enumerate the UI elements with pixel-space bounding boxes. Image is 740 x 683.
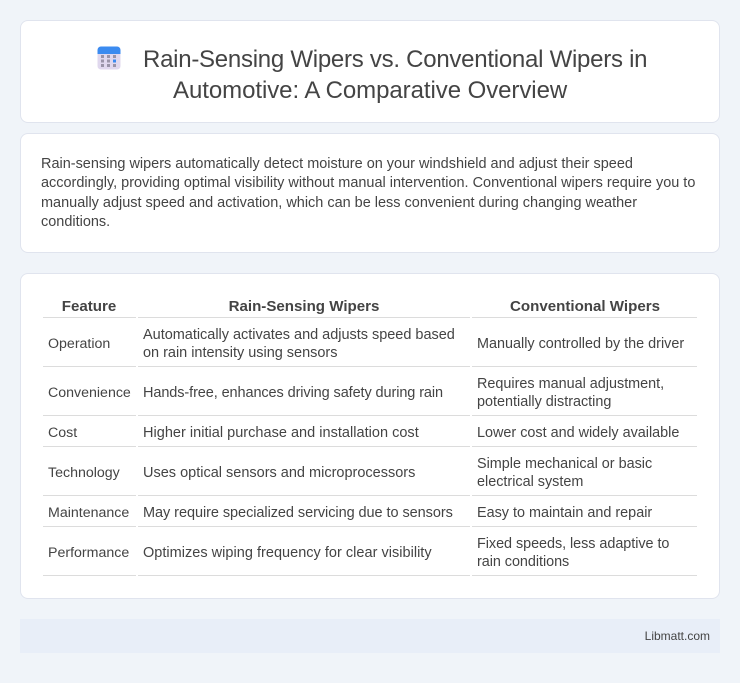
intro text xyxy=(41,156,695,230)
title: Automotive: A Comparative Overview xyxy=(173,77,567,104)
row: Technology: electrical system xyxy=(477,474,583,490)
row: Performance xyxy=(48,536,669,570)
row: Cost: Cost xyxy=(48,425,77,441)
intro text: accordingly, providing optimal visibility without manual intervention. Conventional wipers require you to xyxy=(41,175,695,191)
row: Technology: Simple mechanical or basic xyxy=(477,456,652,472)
row: Performance: Performance xyxy=(48,545,129,561)
row: Cost: Lower cost and widely available xyxy=(477,425,679,441)
row: Cost: Higher initial purchase and installation cost xyxy=(143,425,419,441)
row: Performance: rain conditions xyxy=(477,554,569,570)
intro text: conditions. xyxy=(41,214,110,230)
row: Technology: Technology xyxy=(48,465,120,481)
panel: comparison table xyxy=(20,273,720,599)
row: Performance: Optimizes wiping frequency for clear visibility xyxy=(143,545,432,561)
row: Technology xyxy=(48,456,652,490)
row: Convenience xyxy=(48,376,664,410)
intro text: Rain-sensing wipers automatically detect moisture on your windshield and adjust their speed xyxy=(41,156,633,172)
row: Maintenance: Maintenance xyxy=(48,505,129,521)
title xyxy=(143,46,647,104)
row: Cost xyxy=(48,425,679,441)
row: Operation: Manually controlled by the driver xyxy=(477,336,684,352)
row: Operation: on rain intensity using sensors xyxy=(143,345,337,361)
row: Maintenance: May require specialized servicing due to sensors xyxy=(143,505,453,521)
header: Feature: Feature xyxy=(62,298,116,315)
header: Conventional Wipers: Conventional Wipers xyxy=(510,298,660,315)
footer text: Libmatt.com xyxy=(645,629,710,643)
row: Convenience: Requires manual adjustment, xyxy=(477,376,664,392)
row: Operation xyxy=(48,327,684,361)
footer bar xyxy=(20,619,720,653)
row: Performance: Fixed speeds, less adaptive to xyxy=(477,536,669,552)
intro panel xyxy=(20,133,720,253)
row: Convenience: Hands-free, enhances driving safety during rain xyxy=(143,385,443,401)
row: Convenience: potentially distracting xyxy=(477,394,611,410)
intro text: manually adjust speed and activation, which can be less convenient during changing weather xyxy=(41,194,637,210)
table header xyxy=(62,298,660,315)
icon: calendar xyxy=(98,46,120,70)
header: Rain-Sensing Wipers: Rain-Sensing Wipers xyxy=(229,298,379,315)
row: Technology: Uses optical sensors and microprocessors xyxy=(143,465,415,481)
row: Operation: Operation xyxy=(48,336,110,352)
row: Maintenance: Easy to maintain and repair xyxy=(477,505,652,521)
row: Maintenance xyxy=(48,505,652,521)
row: Convenience: Convenience xyxy=(48,385,131,401)
row: Operation: Automatically activates and adjusts speed based xyxy=(143,327,455,343)
title: Rain-Sensing Wipers vs. Conventional Wipers in xyxy=(143,46,647,73)
header panel xyxy=(20,20,720,123)
